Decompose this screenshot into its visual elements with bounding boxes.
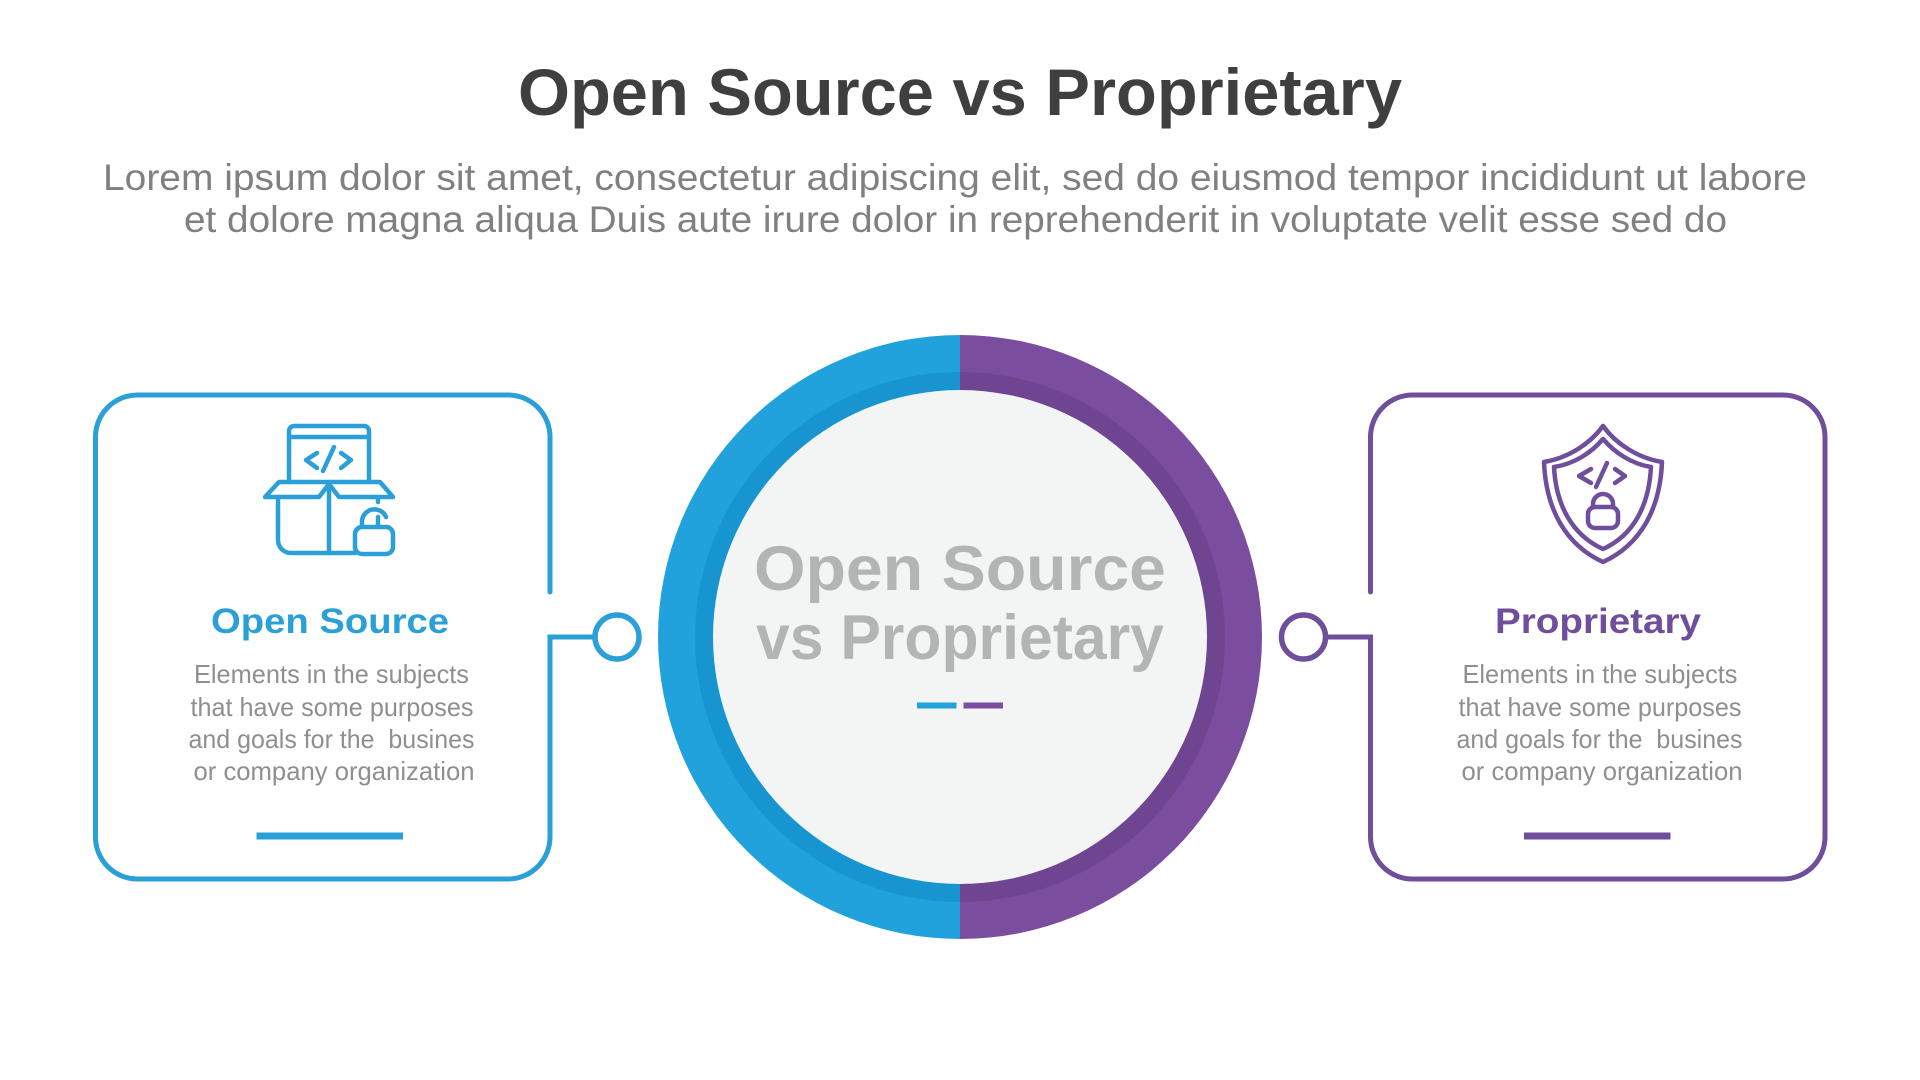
heading: Proprietary [1495,602,1702,641]
description text [188,659,474,786]
card outline [1325,395,1825,879]
subtitle text block: Lorem ipsum dolor sit amet, consectetur adipiscing elit, sed do eiusmod tempor incididunt ut labore [103,157,1807,198]
panel: open source [96,395,639,879]
icon: open box with code window and unlocked padlock [265,426,393,554]
inner shade: blue [695,372,960,902]
description text: or company organization [194,756,474,786]
ring: purple half [960,335,1262,939]
description text [1456,659,1742,786]
icon: shield with code and padlock [1544,426,1662,562]
center dash: purple [964,702,1003,708]
center disc [713,390,1207,884]
card outline [96,395,596,879]
center dash: blue [917,702,956,708]
heading: Open Source [211,602,449,641]
center title [754,534,1166,673]
description text: Elements in the subjects [194,659,469,689]
underline bar [1524,832,1670,840]
subtitle text block [103,157,1807,240]
underline bar [256,832,403,840]
ring: blue half [658,335,960,939]
connector circle [1282,615,1326,659]
description text: that have some purposes [190,692,474,722]
center title: vs Proprietary [756,603,1164,673]
center title: Open Source [754,534,1166,604]
description text: and goals for the busines [1456,724,1742,754]
description text: that have some purposes [1458,692,1742,722]
description text: and goals for the busines [188,724,474,754]
description text: Elements in the subjects [1462,659,1738,689]
inner shade: purple [960,372,1225,902]
connector circle [595,615,639,659]
title: Open Source vs Proprietary [518,55,1402,129]
panel: central ring [658,335,1262,939]
subtitle text block: et dolore magna aliqua Duis aute irure dolor in reprehenderit in voluptate velit esse sed do [184,199,1727,240]
panel: proprietary [1282,395,1825,879]
description text: or company organization [1462,756,1742,786]
